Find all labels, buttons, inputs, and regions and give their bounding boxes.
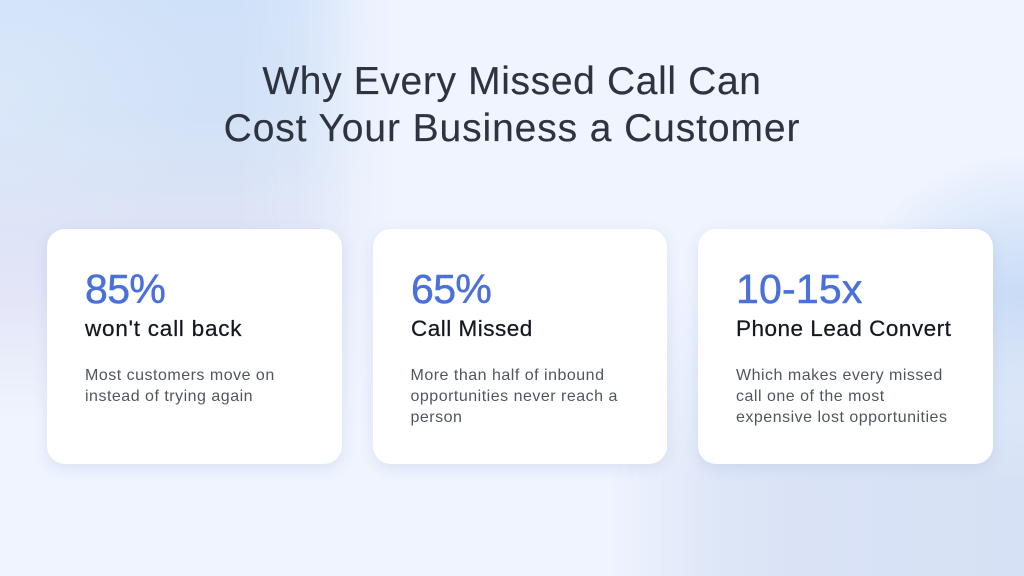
stat: 10-15x: 10-15x — [736, 266, 863, 312]
title: Why Every Missed Call Can — [262, 60, 762, 103]
panel: 85% card — [47, 229, 342, 464]
card description: More than half of inbound — [410, 367, 604, 384]
stat: 65%: 65% — [411, 266, 491, 312]
title: Cost Your Business a Customer — [224, 107, 800, 150]
stat: 85%: 85% — [85, 266, 165, 312]
panel: 10-15x card — [698, 229, 993, 464]
title — [224, 60, 800, 150]
card heading: won't call back — [85, 316, 242, 341]
card heading: Call Missed — [411, 316, 533, 341]
card description: instead of trying again — [85, 388, 253, 405]
card heading: Phone Lead Convert — [736, 316, 951, 341]
card description: call one of the most — [736, 388, 885, 405]
card description — [736, 367, 947, 426]
card description: Which makes every missed — [736, 367, 943, 384]
card description — [410, 367, 618, 426]
panel: 65% card — [373, 229, 667, 464]
card description: Most customers move on — [85, 367, 275, 384]
card description — [85, 367, 275, 405]
card description: person — [410, 409, 462, 426]
card description: expensive lost opportunities — [736, 409, 947, 426]
card description: opportunities never reach a — [410, 388, 618, 405]
